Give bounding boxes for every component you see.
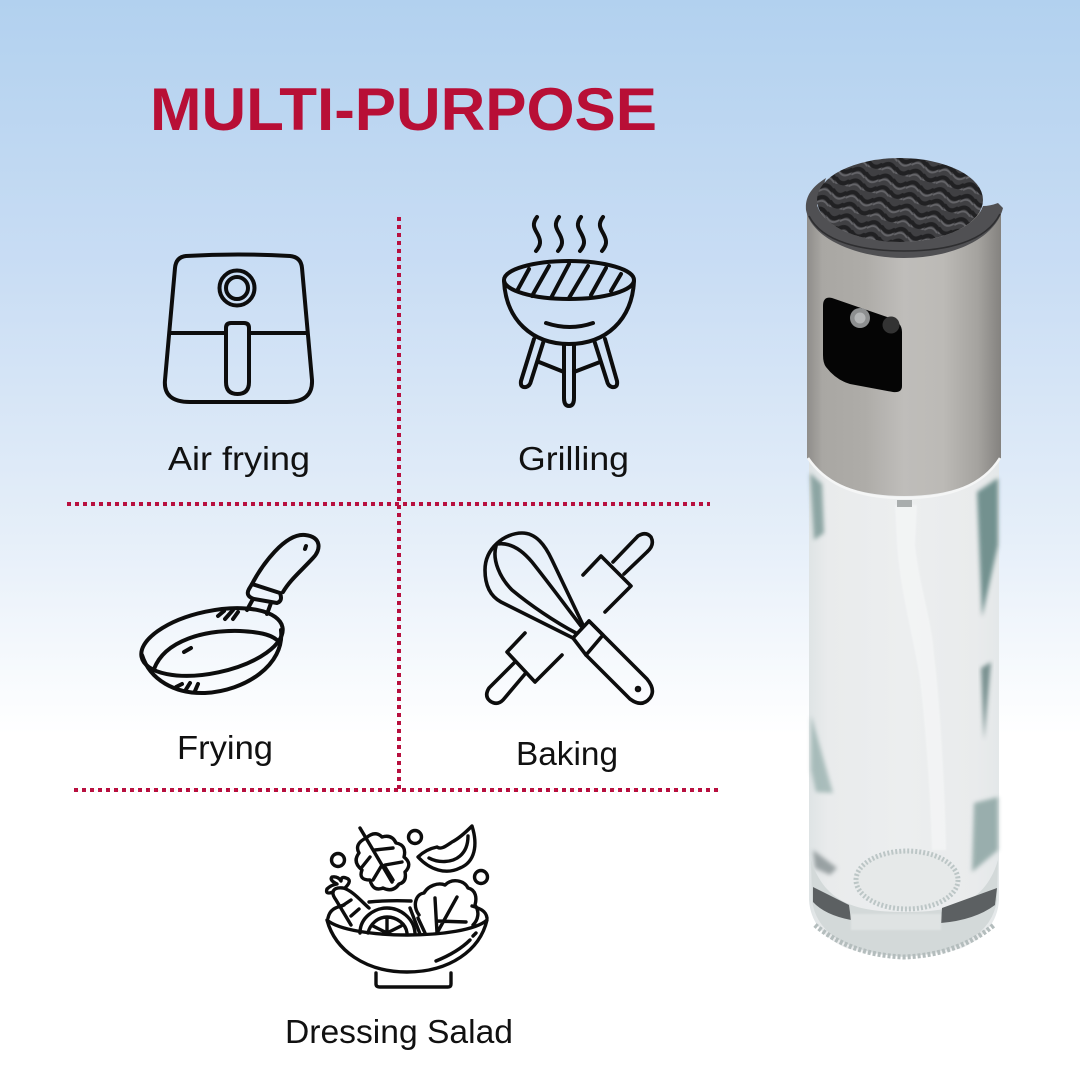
glass body [809, 450, 999, 957]
icon: grill [504, 217, 634, 406]
label: frying: Frying [177, 729, 273, 766]
steel collar [807, 212, 1001, 496]
dip tube [895, 505, 946, 850]
lid [806, 158, 1003, 258]
label: grilling: Grilling [518, 440, 629, 477]
icon: air fryer [165, 254, 312, 402]
glass base [811, 860, 998, 957]
title: MULTI-PURPOSE [150, 76, 657, 143]
icon: salad bowl [327, 826, 488, 987]
icon: frying pan [135, 535, 319, 693]
label: baking: Baking [516, 735, 618, 772]
label: air frying: Air frying [168, 440, 310, 477]
spray window [823, 298, 902, 392]
label: dressing salad: Dressing Salad [285, 1013, 513, 1050]
icon: whisk and rolling pin [485, 533, 652, 703]
product photo: oil spray bottle [806, 158, 1003, 957]
